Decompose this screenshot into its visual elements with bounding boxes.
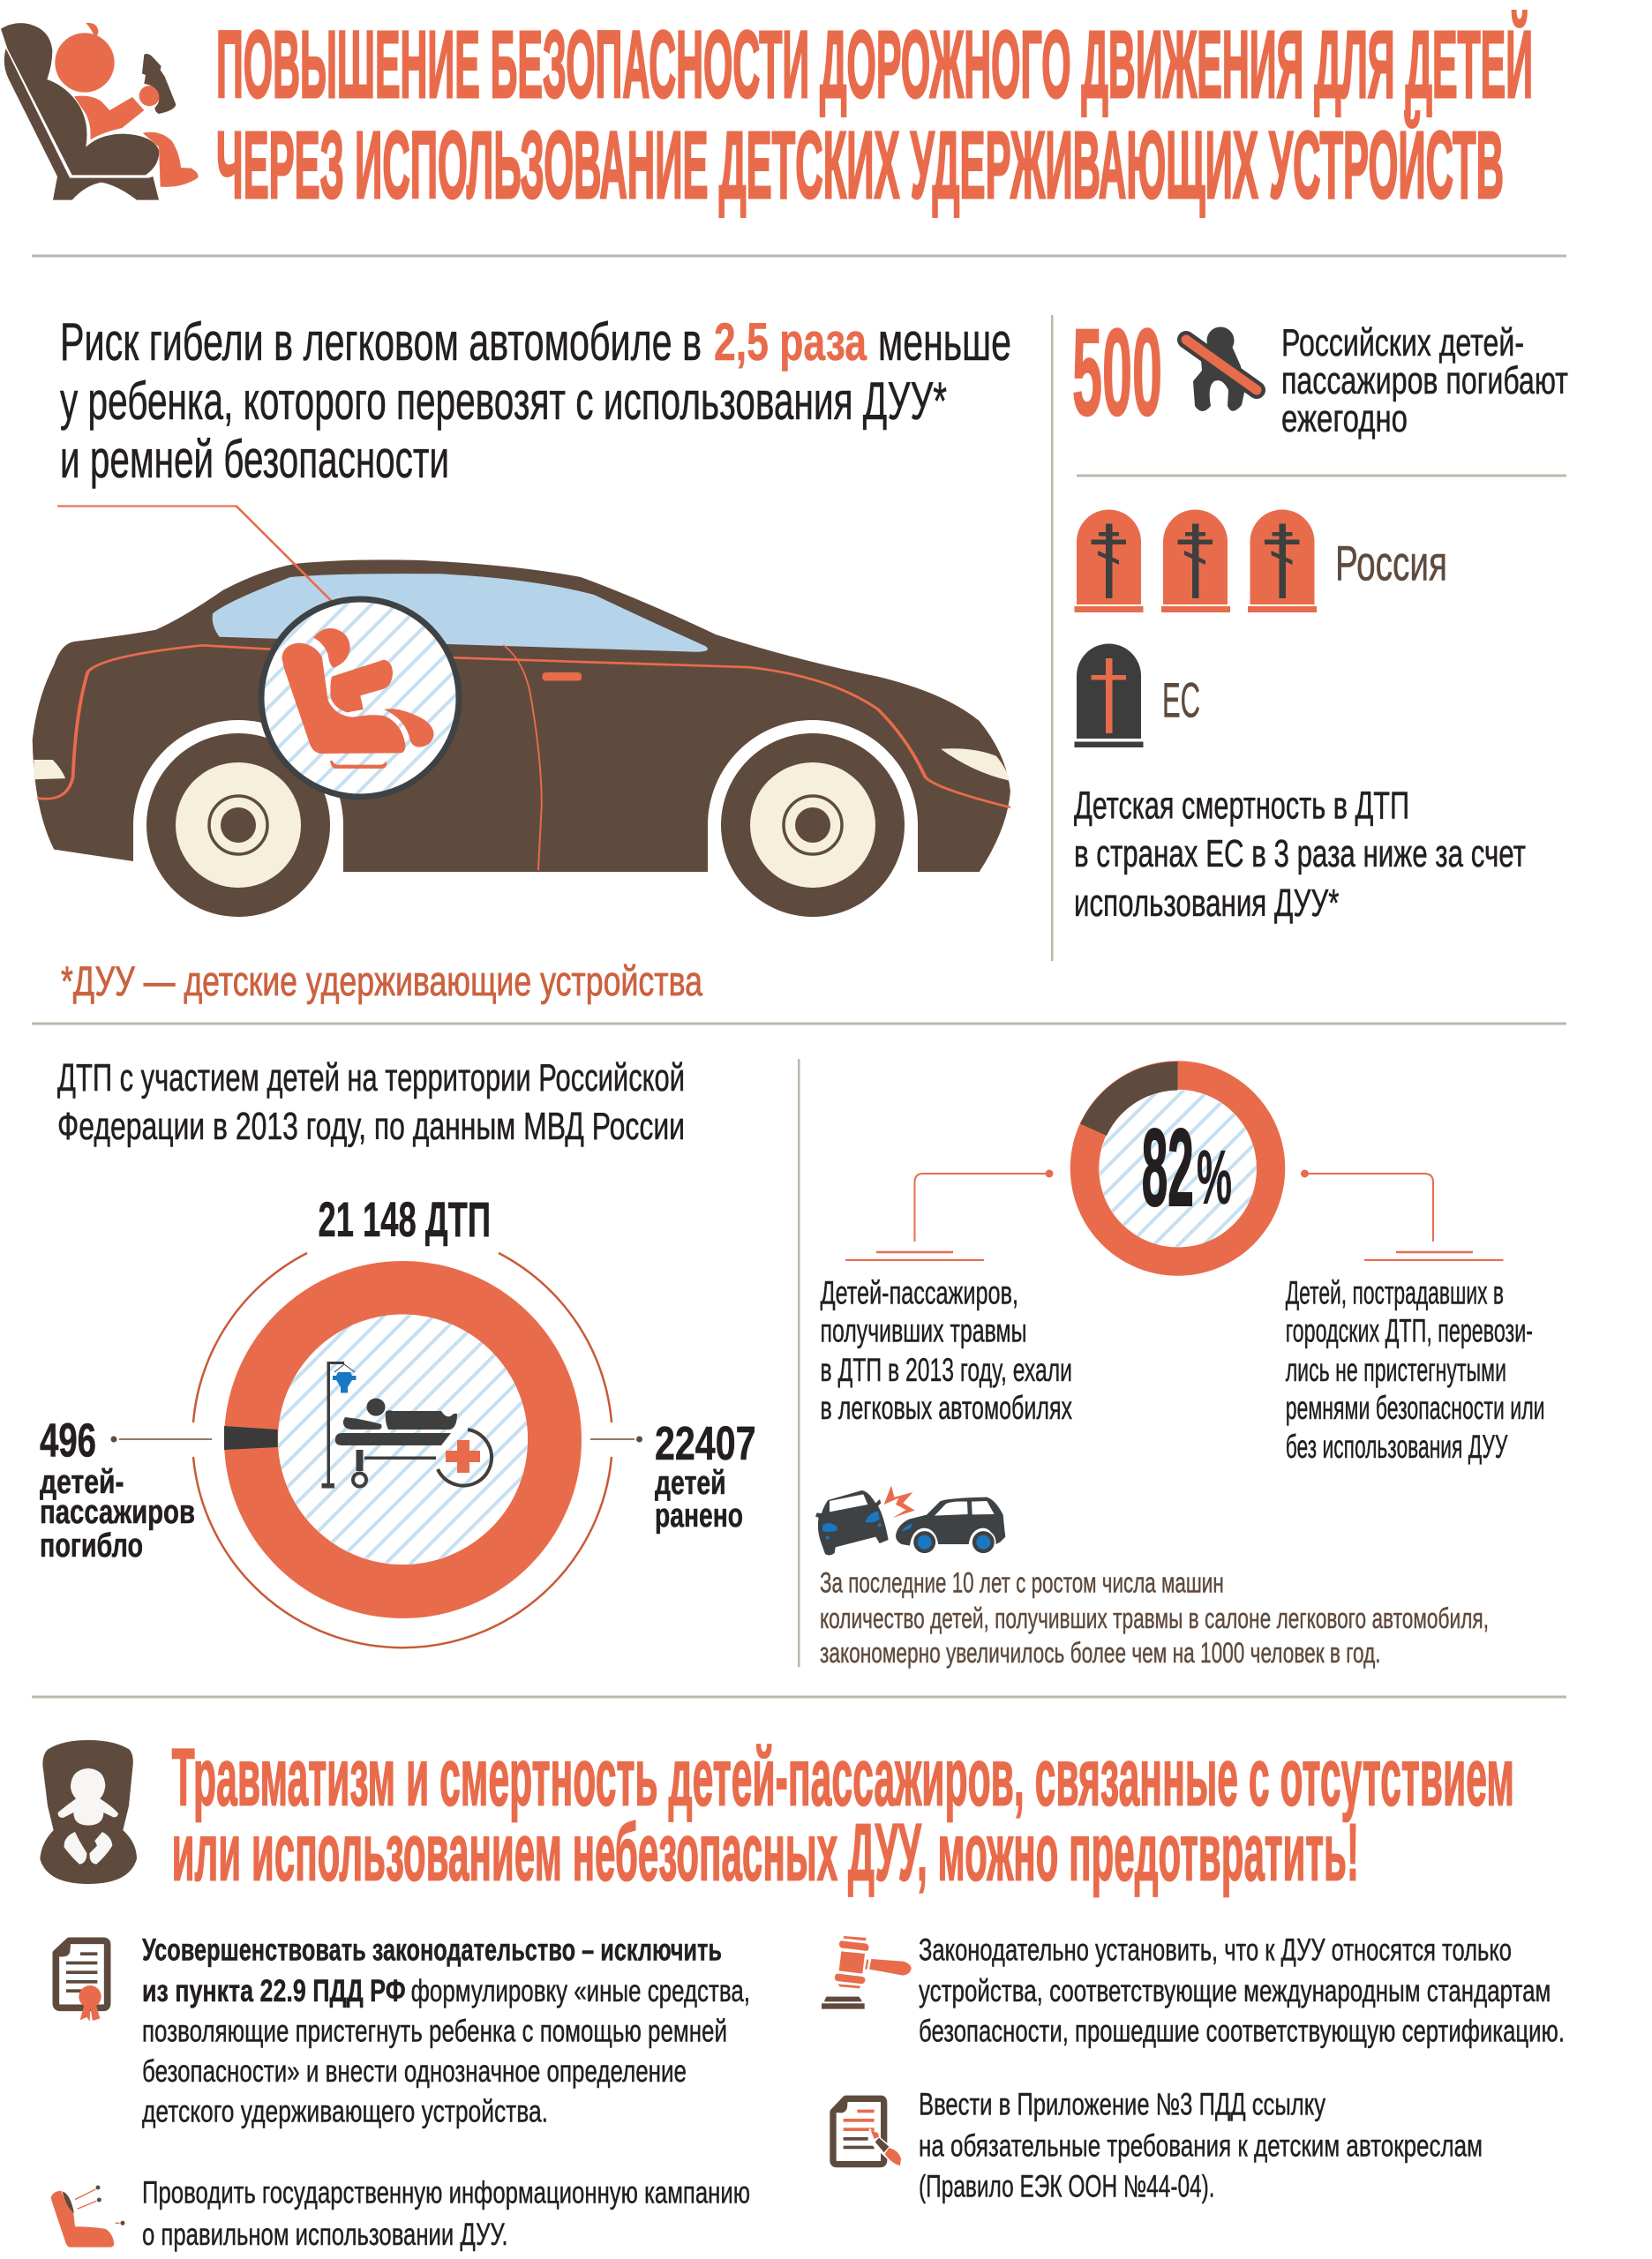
text: improve legislation: формулировку «иные средства, xyxy=(411,1974,750,2008)
icon: gavel xyxy=(822,1936,912,2009)
text: information campaign xyxy=(142,2176,750,2252)
heading: preventable xyxy=(172,1733,1514,1898)
icon: document with pen xyxy=(833,2096,906,2171)
text: appendix reference: (Правило ЕЭК ООН №44-04). xyxy=(919,2170,1215,2204)
text: appendix reference: Ввести в Приложение №3 ПДД ссылку xyxy=(919,2088,1325,2122)
icon: Russia tombstones xyxy=(1075,510,1317,612)
text: annual deaths: ежегодно xyxy=(1281,397,1408,440)
icon: baby in car seat xyxy=(1,23,199,200)
icon: small car seat with rays xyxy=(51,2185,124,2248)
text: ten year trend: За последние 10 лет с ростом числа машин xyxy=(820,1566,1224,1598)
text: ten year trend: закономерно увеличилось более чем на 1000 человек в год. xyxy=(820,1637,1381,1669)
icon: crossed child xyxy=(1186,326,1257,411)
text: information campaign: о правильном использовании ДУУ. xyxy=(142,2218,508,2252)
callout: deaths: погибло xyxy=(40,1527,143,1565)
callout: injured xyxy=(590,1417,755,1535)
risk statement: у ребенка, которого перевозят с использования ДУУ* xyxy=(60,371,947,431)
donut chart: accidents xyxy=(193,1253,612,1647)
text: unbelted children: Детей, пострадавших в xyxy=(1286,1274,1504,1311)
donut chart: 82 percent: 82 xyxy=(1142,1107,1194,1229)
risk statement: Риск гибели в легковом автомобиле в xyxy=(60,312,702,371)
label: EU: ЕС xyxy=(1162,672,1200,728)
footnote: *ДУУ — детские удерживающие устройства xyxy=(61,957,703,1004)
callout: injured: ранено xyxy=(655,1497,743,1535)
icon: child seat from above xyxy=(40,1740,137,1884)
risk statement: 2,5 раза xyxy=(714,312,867,371)
text: passengers in cars: получивших травмы xyxy=(821,1313,1027,1349)
text: information campaign: Проводить государственную информационную кампанию xyxy=(142,2176,750,2210)
stat: total accidents: 21 148 ДТП xyxy=(318,1191,491,1247)
heading: road accidents: ДТП с участием детей на территории Российской xyxy=(57,1056,685,1099)
text: appendix reference xyxy=(919,2088,1483,2204)
rear wheel xyxy=(133,720,343,922)
text: passengers in cars: в ДТП в 2013 году, ехали xyxy=(821,1352,1072,1388)
text: improve legislation: безопасности» и внести однозначное определение xyxy=(142,2054,687,2089)
text: passengers in cars: в легковых автомобилях xyxy=(821,1390,1072,1426)
front wheel xyxy=(708,720,918,922)
callout: injured: детей xyxy=(655,1465,726,1502)
donut chart: 82 percent xyxy=(1080,1062,1271,1262)
heading: road accidents xyxy=(57,1056,685,1148)
connector: right xyxy=(1302,1170,1504,1260)
text: EU mortality: Детская смертность в ДТП xyxy=(1074,784,1409,828)
label: Russia: Россия xyxy=(1335,535,1447,591)
text: unbelted children xyxy=(1286,1274,1545,1465)
text: improve legislation: детского удерживающего устройства. xyxy=(142,2095,548,2129)
text: EU mortality: использования ДУУ* xyxy=(1074,882,1340,925)
text: passengers in cars xyxy=(821,1274,1072,1426)
callout: injured: 22407 xyxy=(655,1417,755,1470)
text: improve legislation xyxy=(142,1933,750,2129)
callout: deaths xyxy=(40,1415,212,1565)
text: improve legislation: из пункта 22.9 ПДД РФ xyxy=(142,1974,406,2008)
text: unbelted children: лись не пристегнутыми xyxy=(1286,1352,1506,1388)
text: EU mortality xyxy=(1074,784,1526,925)
connector: left xyxy=(845,1170,1052,1260)
text: annual deaths: Российских детей- xyxy=(1281,321,1524,364)
callout: deaths: пассажиров xyxy=(40,1494,195,1531)
callout: deaths: детей- xyxy=(40,1464,124,1501)
text: annual deaths xyxy=(1281,321,1568,440)
text: 500 xyxy=(1072,303,1162,441)
risk statement xyxy=(60,312,1011,489)
text: ten year trend xyxy=(820,1566,1489,1669)
text: legislate standards xyxy=(919,1933,1565,2049)
car illustration xyxy=(33,507,1010,922)
text: unbelted children: без использования ДУУ xyxy=(1286,1429,1508,1465)
icon: car crash xyxy=(815,1485,1005,1555)
risk statement: и ремней безопасности xyxy=(60,430,449,489)
icon: certificate xyxy=(56,1939,108,2022)
text: improve legislation: Усовершенствовать законодательство – исключить xyxy=(142,1933,722,1968)
risk statement: меньше xyxy=(878,312,1011,371)
title xyxy=(216,11,1533,218)
icon: EU tombstone xyxy=(1075,644,1144,747)
icon: injured child on stretcher xyxy=(321,1362,492,1488)
magnifier with car seat xyxy=(261,599,459,797)
text: improve legislation: позволяющие пристегнуть ребенка с помощью ремней xyxy=(142,2015,727,2049)
text: passengers in cars: Детей-пассажиров, xyxy=(821,1274,1018,1311)
heading: road accidents: Федерации в 2013 году, по данным МВД России xyxy=(57,1105,685,1148)
callout: deaths: 496 xyxy=(40,1415,96,1467)
donut chart: 82 percent: % xyxy=(1197,1136,1232,1220)
